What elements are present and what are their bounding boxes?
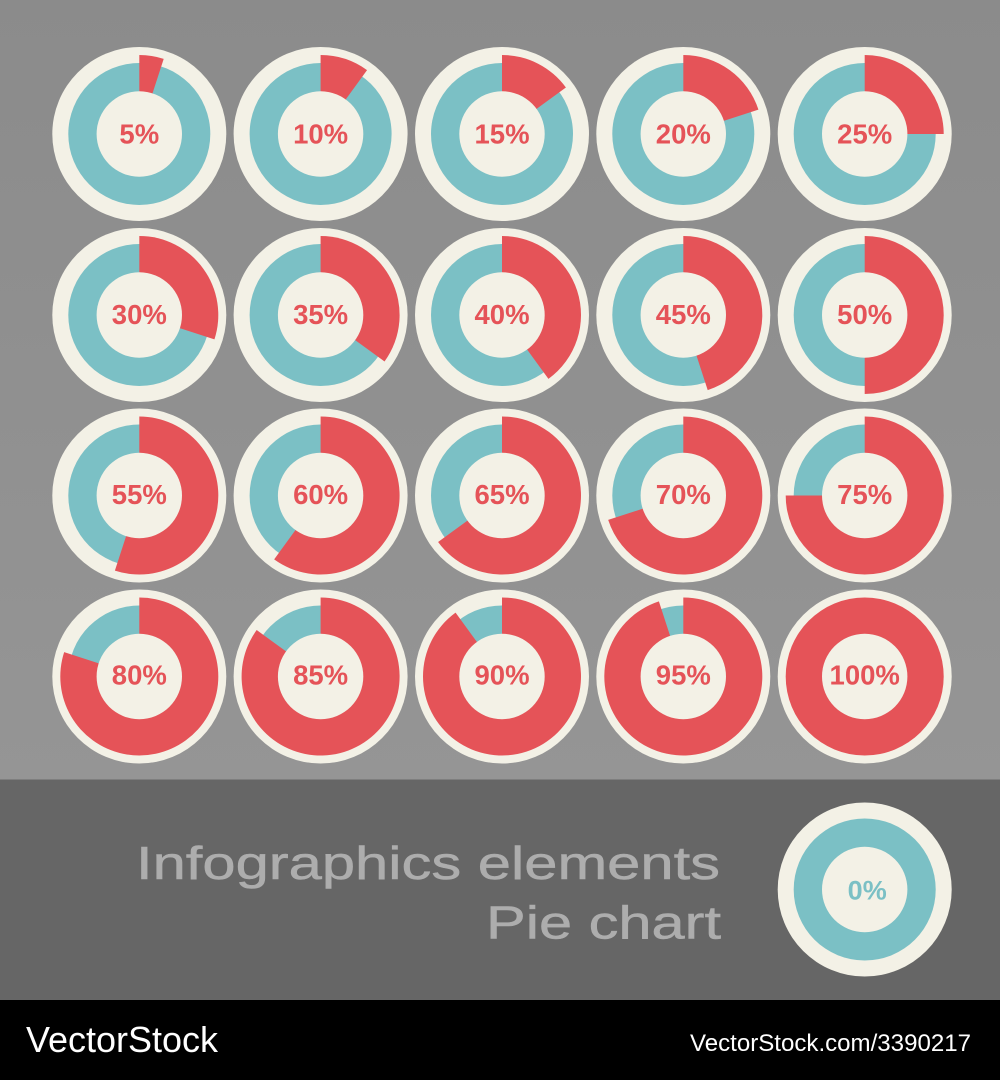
donut 50%: 50%: [837, 299, 892, 330]
donut 65%: 65%: [474, 479, 530, 510]
donut 40%: 40%: [474, 299, 530, 330]
donut 30%: 30%: [112, 299, 167, 330]
donut 60%: [234, 408, 408, 582]
donut 80%: [52, 590, 226, 764]
donut 45%: 45%: [656, 299, 711, 330]
donut 90%: 90%: [474, 660, 530, 690]
donut 60%: 60%: [293, 479, 348, 510]
donut 85%: [234, 590, 408, 764]
donut 75%: [778, 408, 952, 582]
footer image id: VectorStock.com/3390217: [690, 1030, 971, 1057]
donut 15%: [415, 47, 589, 221]
donut 70%: [596, 408, 770, 582]
donut 10%: 10%: [293, 118, 348, 150]
donut 50%: [778, 228, 952, 402]
donut 20%: [596, 47, 770, 221]
donut 20%: 20%: [656, 118, 711, 150]
donut 0%: 0%: [848, 876, 887, 906]
background panel: [0, 0, 1000, 780]
donut 40%: [415, 228, 589, 402]
donut 25%: 25%: [837, 118, 892, 150]
donut 45%: [596, 228, 770, 402]
donut 25%: [778, 47, 952, 221]
donut 85%: 85%: [293, 660, 348, 690]
donut 80%: 80%: [112, 660, 167, 690]
donut 5%: [52, 47, 226, 221]
title band: [0, 780, 1000, 1000]
donut 65%: [415, 408, 589, 582]
heading: Pie chart: Pie chart: [486, 896, 721, 948]
donut 55%: 55%: [112, 479, 167, 510]
donut 35%: [234, 228, 408, 402]
donut 100%: 100%: [830, 660, 900, 690]
donut 30%: [52, 228, 226, 402]
footer logo text: VectorStock: [26, 1019, 219, 1060]
footer bar: [0, 1000, 1000, 1080]
donut 55%: [52, 408, 226, 582]
donut 95%: [596, 590, 770, 764]
donut 5%: 5%: [119, 118, 159, 150]
donut 0%: [778, 802, 952, 976]
donut 15%: 15%: [474, 118, 530, 150]
donut 35%: 35%: [293, 299, 348, 330]
donut 75%: 75%: [837, 479, 892, 510]
donut 95%: 95%: [656, 660, 711, 690]
donut 10%: [234, 47, 408, 221]
donut 100%: [778, 590, 952, 764]
donut 70%: 70%: [656, 479, 711, 510]
donut 90%: [415, 590, 589, 764]
heading: Infographics elements: Infographics elements: [136, 837, 720, 889]
